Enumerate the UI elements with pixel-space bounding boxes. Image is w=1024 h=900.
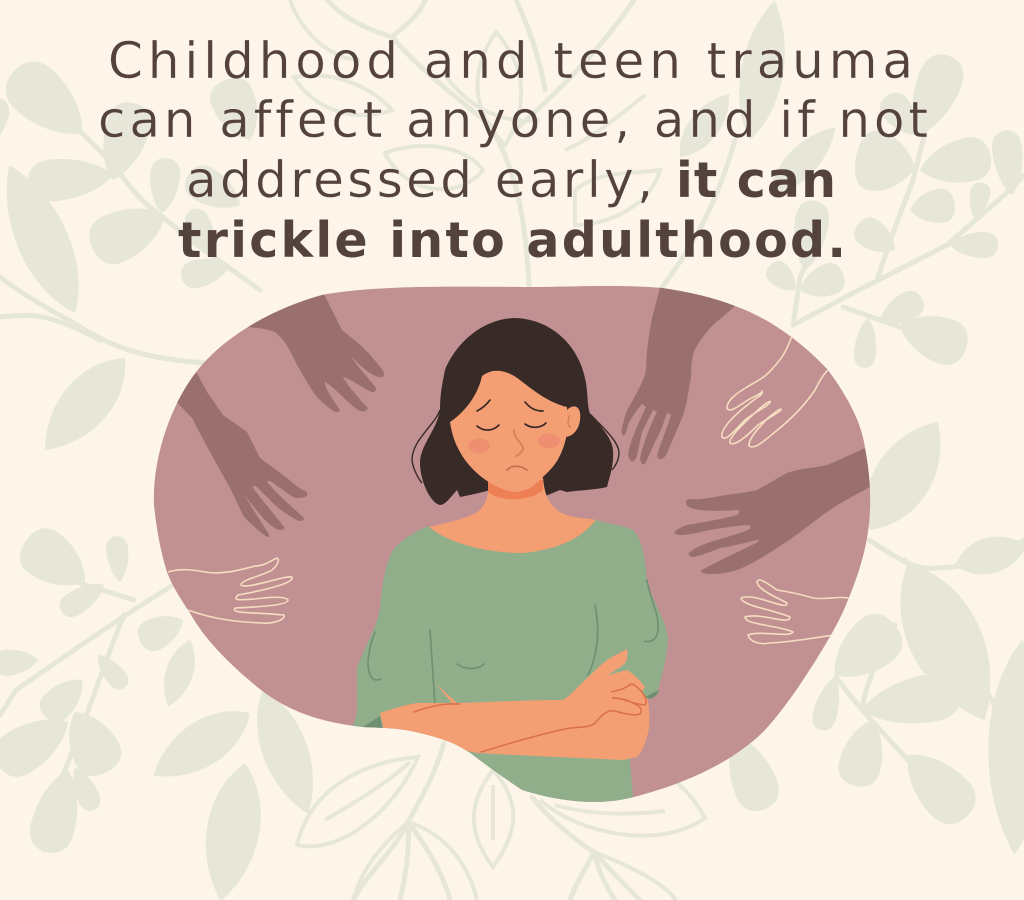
shirt folds xyxy=(368,580,658,705)
facial details xyxy=(477,400,546,430)
title text: Childhood and teen trauma xyxy=(108,32,913,90)
filled leaves lower right xyxy=(818,605,911,695)
icon: outline hand upper right xyxy=(722,336,828,447)
title text: it can xyxy=(676,152,836,209)
arm crease lines xyxy=(414,684,646,752)
cheeks xyxy=(468,438,490,454)
figure: woman xyxy=(350,318,668,810)
icon: outline hand lower left xyxy=(168,558,292,623)
filled leaves lower left xyxy=(12,520,99,602)
body / neck skin xyxy=(430,478,597,553)
filled leaves upper right xyxy=(729,0,795,144)
ear xyxy=(565,406,580,437)
icon: dark hand left xyxy=(177,372,308,537)
icon: outline hand lower right xyxy=(741,580,849,644)
hair xyxy=(420,318,613,505)
neck shadow xyxy=(488,480,543,499)
icon: dark hand right xyxy=(675,447,875,574)
icon: dark hand top right xyxy=(622,280,742,464)
shirt xyxy=(350,520,668,810)
arms xyxy=(380,649,650,760)
title text xyxy=(98,32,928,269)
sleeve shadow xyxy=(363,716,382,728)
outline leaves xyxy=(290,0,705,900)
title text: addressed early, xyxy=(186,151,653,209)
title text: trickle into adulthood. xyxy=(178,212,846,269)
title text: can affect anyone, and if not xyxy=(98,91,928,149)
filled leaves upper left xyxy=(0,51,100,153)
icon: dark hand top left xyxy=(240,290,384,412)
face xyxy=(450,371,567,492)
blob background xyxy=(140,280,880,810)
hair strands xyxy=(412,410,440,483)
illustration: sad woman in blob surrounded by hands xyxy=(140,280,880,810)
